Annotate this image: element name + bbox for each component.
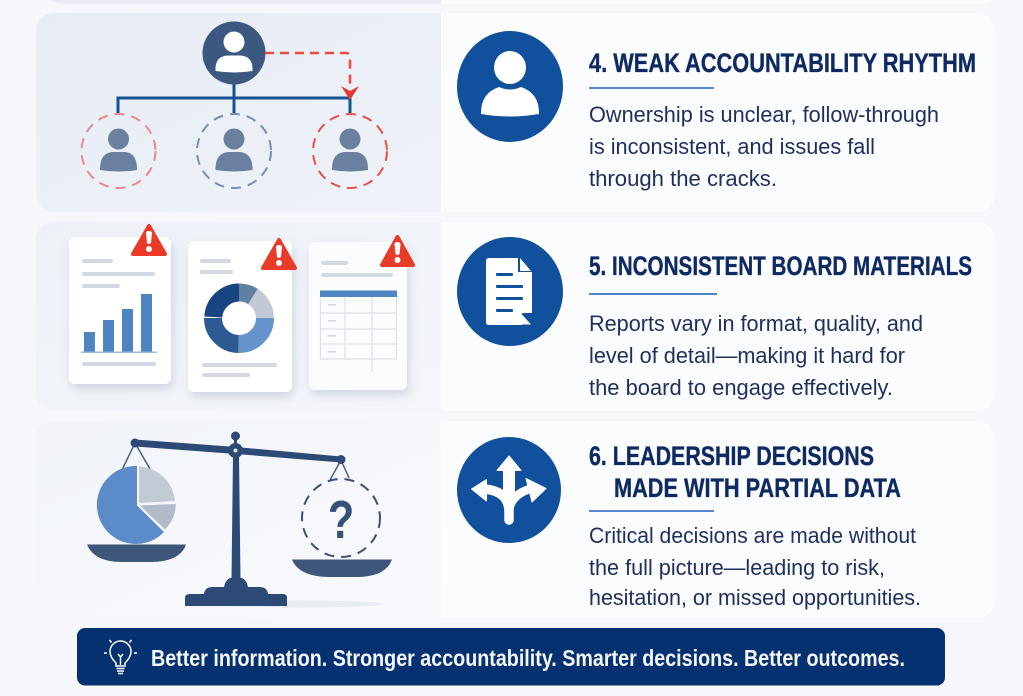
icon: warning 2 [263,240,295,268]
icon: warning 1 [133,226,165,254]
previous row remnants [50,0,992,4]
unknown data [302,479,380,557]
body text: the board to engage effectively. [589,375,893,400]
icon: document badge [457,237,563,346]
icon: branching arrows badge [457,437,561,543]
icon: team member left [82,114,156,188]
document: donut report [188,241,292,392]
heading rule [589,87,714,89]
banner: closing message [77,628,945,686]
heading: MADE WITH PARTIAL DATA [614,473,901,503]
body text: Critical decisions are made without [589,523,916,548]
body text: hesitation, or missed opportunities. [589,585,921,610]
icon: light bulb [104,640,137,674]
heading rule [589,510,714,512]
panel: weak accountability text [441,13,995,212]
panel: inconsistent materials text [441,222,995,411]
document: bar chart report [69,237,171,384]
arrow: escalation [265,53,359,100]
unknown data: ? [328,491,354,550]
scale [122,432,385,608]
panel: partial data illustration [36,421,441,618]
heading rule [589,293,717,295]
right pan [292,560,392,577]
body text: Reports vary in format, quality, and [589,311,923,336]
pie chart [97,466,176,544]
donut chart [213,292,265,344]
banner text: Better information. Stronger accountability. Smarter decisions. Better outcomes. [151,645,905,671]
icon: warning 3 [382,237,413,265]
body text: through the cracks. [589,166,777,191]
icon: person badge [457,31,563,142]
panel: weak accountability illustration [36,13,441,212]
body text: the full picture—leading to risk, [589,555,885,580]
heading: 6. LEADERSHIP DECISIONS [589,441,874,471]
panel: inconsistent materials illustration [36,222,441,411]
icon: team member centre [197,114,271,188]
icon: manager [202,22,266,84]
left pan [87,544,186,562]
body text: is inconsistent, and issues fall [589,134,875,159]
body text: Ownership is unclear, follow-through [589,102,939,127]
body text: level of detail—making it hard for [589,343,905,368]
panel: partial data text [441,421,995,618]
org chart connectors [118,84,350,113]
icon: team member right [313,114,387,188]
document: table report [309,242,407,390]
